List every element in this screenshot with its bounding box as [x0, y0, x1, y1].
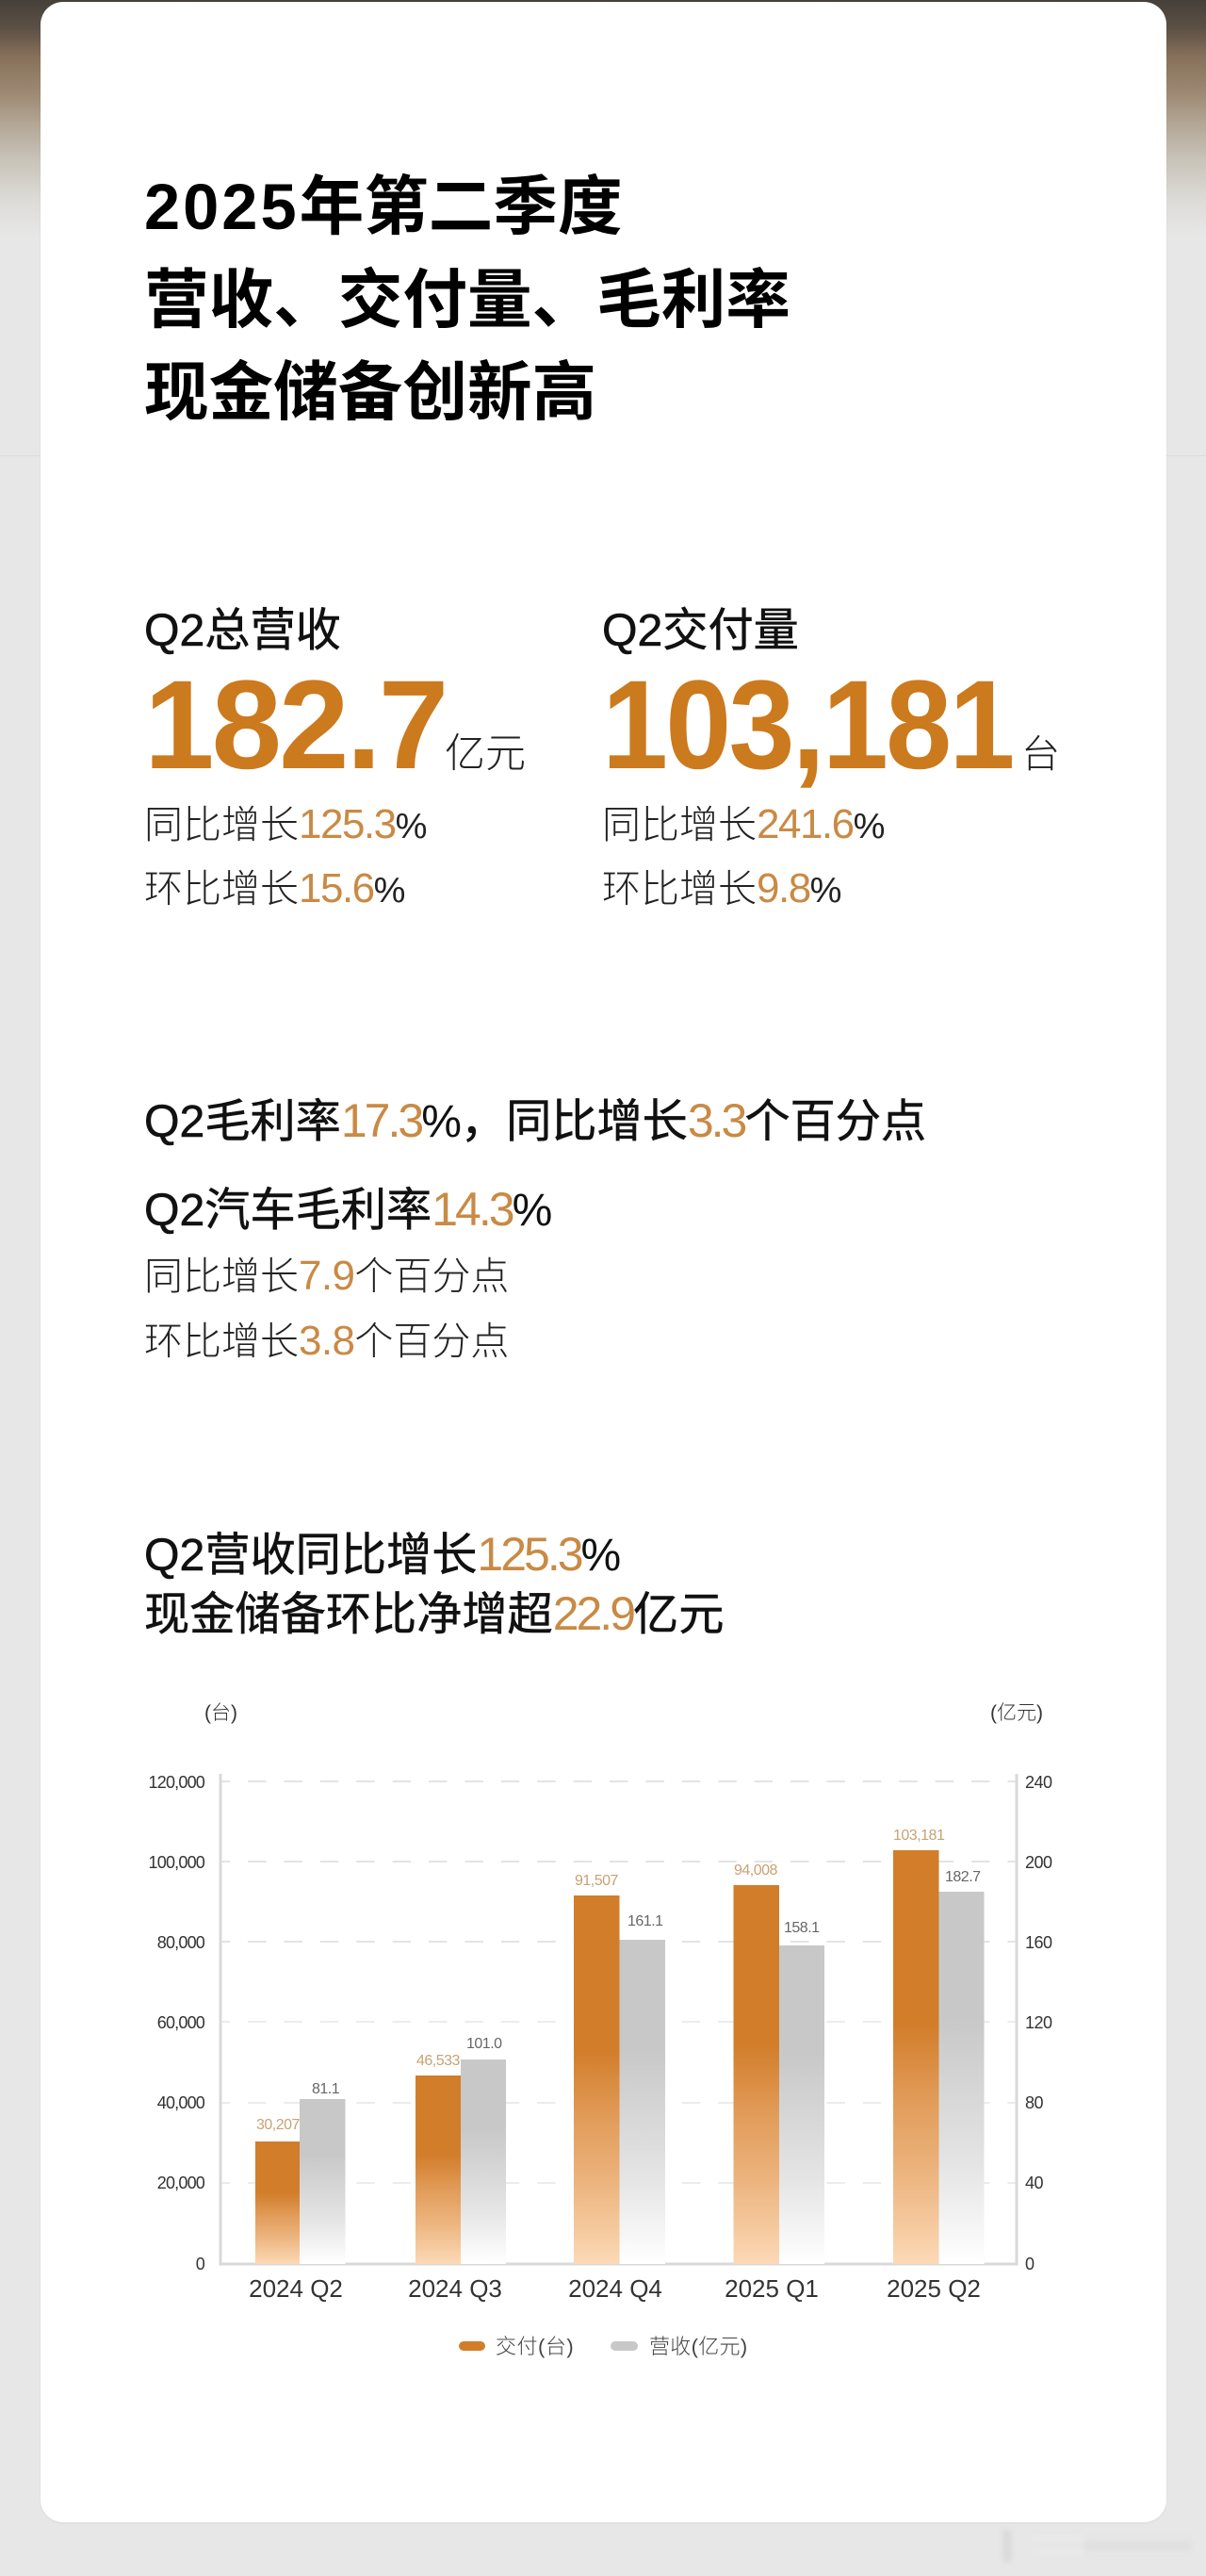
left axis labels: 60,000	[157, 2013, 205, 2032]
delivery value labels: 91,507	[575, 1873, 619, 1889]
x axis labels	[249, 2274, 981, 2303]
left axis labels: 120,000	[149, 1773, 205, 1792]
left axis labels: 0	[196, 2255, 205, 2273]
bars: 2024 Q4	[574, 1895, 665, 2264]
bar chart: deliveries and revenue by quarter	[149, 1702, 1052, 2358]
revenue value labels: 158.1	[784, 1920, 820, 1936]
revenue value labels: 81.1	[312, 2081, 340, 2097]
bars: 2025 Q2	[893, 1850, 984, 2264]
text: gross margin headline: Q2毛利率17.3%，同比增长3.3个百分点	[144, 1094, 926, 1147]
x axis labels: 2025 Q1	[725, 2274, 819, 2303]
heading: chart section: Q2营收同比增长125.3%	[144, 1528, 620, 1581]
text: QoQ growth: 环比增长15.6%	[144, 865, 404, 911]
unit: 100M yuan: 亿元	[445, 731, 526, 777]
right axis labels: 240	[1025, 1773, 1052, 1792]
title: 营收、交付量、毛利率	[144, 264, 790, 336]
unit: vehicles: 台	[1021, 732, 1060, 776]
x axis labels: 2024 Q2	[249, 2274, 343, 2303]
heading: chart section	[144, 1528, 724, 1640]
delivery value labels	[256, 1828, 945, 2133]
revenue value labels: 101.0	[466, 2036, 502, 2052]
left axis labels: 40,000	[157, 2093, 205, 2112]
delivery value labels: 103,181	[893, 1828, 945, 1844]
right axis labels	[1025, 1773, 1052, 2273]
axes	[220, 1774, 1017, 2264]
title: 现金储备创新高	[144, 356, 596, 429]
text: YoY growth: 同比增长241.6%	[602, 801, 884, 847]
panel: Q2 deliveries	[602, 605, 1060, 911]
left axis labels: 20,000	[157, 2174, 205, 2192]
right axis labels: 200	[1025, 1853, 1052, 1872]
bars: 2024 Q3	[416, 2059, 506, 2264]
revenue value labels	[312, 1869, 981, 2097]
right axis labels: 40	[1025, 2174, 1044, 2192]
delivery value labels: 46,533	[416, 2053, 461, 2069]
panel: Q2 total revenue	[144, 605, 526, 911]
left axis labels: 100,000	[149, 1853, 205, 1872]
axis unit: 100M yuan: (亿元)	[990, 1702, 1043, 1724]
heading: Q2 deliveries: Q2交付量	[602, 605, 799, 656]
legend	[459, 2335, 747, 2358]
heading: chart section: 现金储备环比净增超22.9亿元	[144, 1587, 724, 1640]
big number: revenue: 182.7	[144, 655, 446, 796]
title	[144, 171, 790, 429]
text: QoQ growth: 环比增长9.8%	[602, 865, 840, 911]
right axis labels: 160	[1025, 1933, 1052, 1952]
bars: 2024 Q2	[255, 2099, 345, 2264]
legend: 营收(亿元)	[649, 2335, 747, 2358]
revenue value labels: 182.7	[945, 1869, 981, 1885]
x axis labels: 2024 Q4	[568, 2274, 662, 2303]
panel: gross margin	[144, 1094, 926, 1364]
title: 2025年第二季度	[144, 171, 623, 243]
text: QoQ points: 环比增长3.8个百分点	[144, 1318, 509, 1364]
right axis labels: 120	[1025, 2013, 1052, 2032]
watermark: blurred mark bottom right	[1003, 2532, 1011, 2560]
left axis labels: 80,000	[157, 1933, 205, 1952]
text: YoY growth: 同比增长125.3%	[144, 801, 426, 847]
x axis labels: 2024 Q3	[408, 2274, 502, 2303]
text: YoY points: 同比增长7.9个百分点	[144, 1253, 509, 1299]
text: auto gross margin: Q2汽车毛利率14.3%	[144, 1183, 551, 1236]
heading: Q2 revenue: Q2总营收	[144, 605, 341, 656]
right axis labels: 0	[1025, 2255, 1035, 2273]
revenue value labels: 161.1	[627, 1913, 663, 1929]
x axis labels: 2025 Q2	[887, 2274, 981, 2303]
legend: 交付(台)	[496, 2335, 574, 2358]
background: brown top gradient	[0, 0, 1206, 245]
delivery value labels: 30,207	[256, 2117, 301, 2133]
delivery value labels: 94,008	[734, 1862, 778, 1879]
bars: 2025 Q1	[733, 1885, 824, 2264]
axis unit: vehicles: (台)	[204, 1702, 237, 1724]
right axis labels: 80	[1025, 2093, 1044, 2112]
big number: deliveries: 103,181	[602, 655, 1013, 796]
left axis labels	[149, 1773, 205, 2273]
